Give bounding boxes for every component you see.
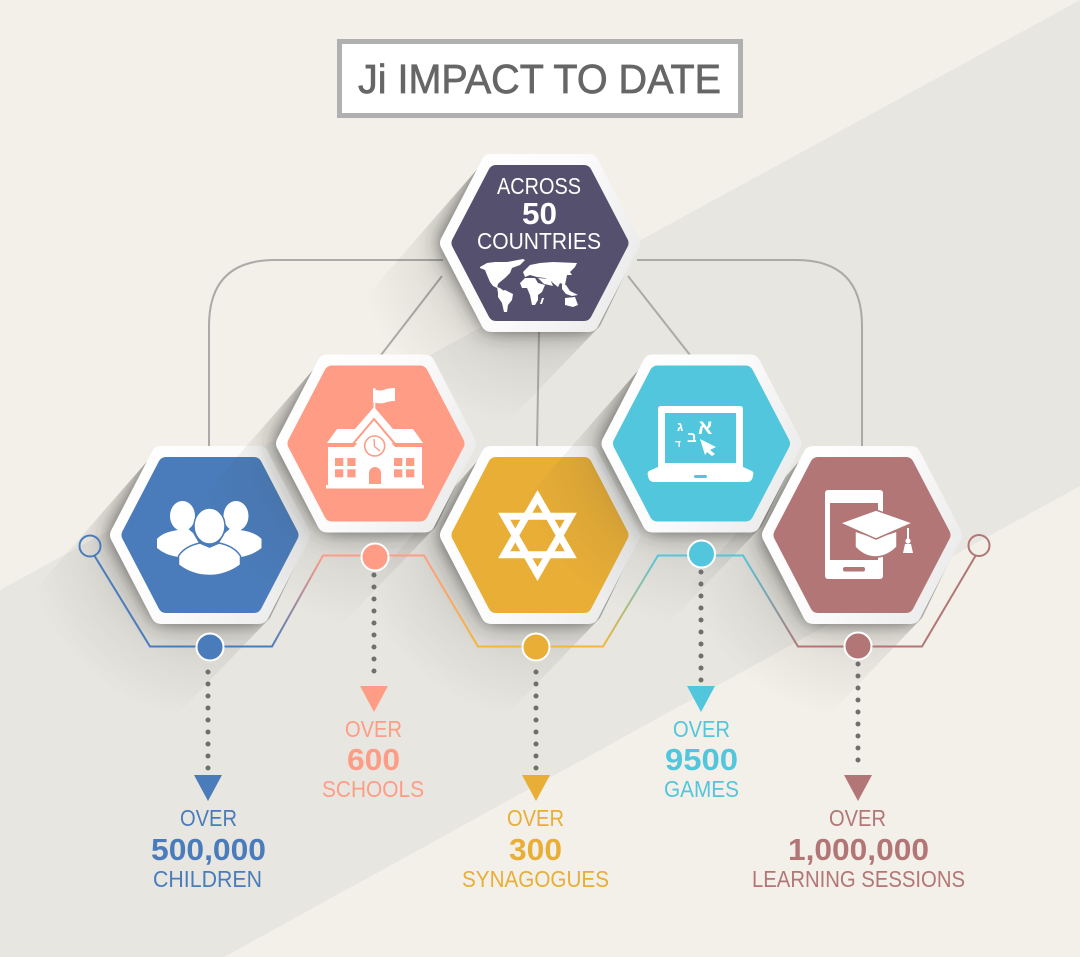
open node left <box>80 536 100 556</box>
node: schools <box>362 544 388 570</box>
stat: 1,000,000 learning sessions: OVER <box>829 805 886 831</box>
node: learning sessions <box>844 632 872 660</box>
dotted arrow: children <box>194 672 222 801</box>
hexagon: across 50 countries <box>450 164 630 322</box>
stat: 9500 games: OVER <box>673 716 730 742</box>
dotted arrow: learning sessions <box>844 664 872 801</box>
dotted arrow: synagogues <box>522 672 550 801</box>
icon: school building <box>326 388 424 488</box>
stat: 600 schools: OVER <box>345 716 402 742</box>
stat: 300 synagogues <box>462 805 609 892</box>
node: synagogues <box>522 634 550 660</box>
hexagon: schools <box>286 364 466 522</box>
icon: world map <box>480 259 578 312</box>
stat: 300 synagogues: SYNAGOGUES <box>462 866 609 892</box>
stat: 9500 games: 9500 <box>665 742 738 777</box>
stat: 1,000,000 learning sessions <box>752 805 965 892</box>
stat: 600 schools: SCHOOLS <box>322 776 424 802</box>
icon: star of David <box>504 497 571 574</box>
stat: 300 synagogues: OVER <box>507 805 564 831</box>
stat: 9500 games <box>664 716 739 802</box>
icon: laptop with Hebrew letters <box>648 406 753 482</box>
hexagon: learning sessions <box>772 456 952 614</box>
label: countries: COUNTRIES <box>477 228 601 254</box>
stat: 1,000,000 learning sessions: LEARNING SESSIONS <box>752 866 965 892</box>
icon: tablet with graduation cap <box>825 490 913 579</box>
icon: group of people <box>157 501 262 576</box>
node: children <box>196 634 224 660</box>
stat: 1,000,000 learning sessions: 1,000,000 <box>788 832 929 867</box>
stat: 9500 games: GAMES <box>664 776 739 802</box>
stat: 600 schools <box>322 716 424 802</box>
open node right <box>968 535 990 556</box>
number: 50: 50 <box>522 196 557 231</box>
stat: 500,000 children: 500,000 <box>151 832 266 867</box>
node: games <box>688 540 715 568</box>
stat: 500,000 children <box>151 805 266 892</box>
hexagon: synagogues <box>450 456 630 614</box>
dotted arrow: schools <box>360 575 388 712</box>
dotted arrow: games <box>687 572 715 712</box>
icon: laptop with Hebrew letters: א <box>698 416 712 439</box>
hexagon: games <box>612 364 792 522</box>
connector lines from top hexagon <box>209 260 862 446</box>
label: across: ACROSS <box>497 173 581 199</box>
icon: laptop with Hebrew letters: ד <box>675 439 681 450</box>
stat: 300 synagogues: 300 <box>509 832 562 867</box>
icon: laptop with Hebrew letters: ג <box>677 419 683 434</box>
timeline line with gradient <box>94 555 976 646</box>
stat: 500,000 children: OVER <box>180 805 237 831</box>
stat: 600 schools: 600 <box>347 742 400 777</box>
stat: 500,000 children: CHILDREN <box>153 866 262 892</box>
hexagon: children <box>120 456 300 614</box>
title box <box>340 42 740 116</box>
icon: laptop with Hebrew letters: ב <box>687 429 697 446</box>
title text: Ji IMPACT TO DATE <box>358 56 721 102</box>
